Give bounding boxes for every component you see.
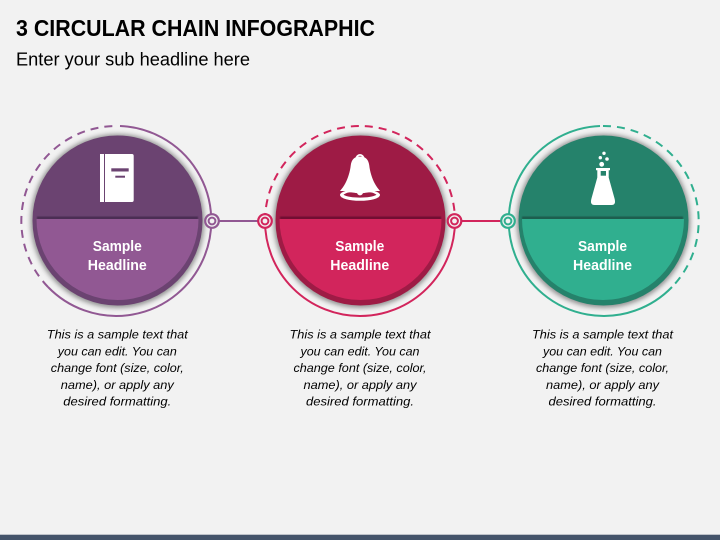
outer ring: dashed arc [603,126,699,287]
headline: Headline [573,258,632,274]
body text: name), or apply any [304,378,417,392]
body text [47,328,188,408]
panel: purple circle [21,126,219,408]
dark disc [518,136,688,306]
body text: change font (size, color, [536,361,669,375]
headline [88,239,147,274]
body text: change font (size, color, [294,361,426,375]
connector: crimson link [454,220,508,222]
connector node: right [448,214,461,228]
headline: Sample [93,239,142,255]
circle shadow [516,134,690,308]
icon: flask [591,152,615,205]
headline: Headline [88,258,147,274]
icon: book [100,154,134,202]
outer ring: dashed arc [265,126,455,221]
connector node [205,214,219,228]
body text [532,328,674,408]
sub headline: Enter your sub headline here [16,50,250,70]
body text: you can edit. You can [542,344,662,358]
headline: Headline [330,258,389,274]
body text: desired formatting. [63,394,171,408]
connector node [501,214,515,228]
body text: change font (size, color, [51,361,184,375]
body text: you can edit. You can [57,344,177,358]
divider shadow [280,216,441,220]
headline [573,239,632,274]
divider shadow [522,216,683,220]
dark disc [276,136,446,306]
body text [290,328,431,408]
body text: This is a sample text that [47,328,188,342]
light lower half [280,219,442,300]
connector node: left [258,214,272,228]
circle shadow [30,134,204,308]
circle shadow [274,134,448,308]
headline: Sample [335,239,384,255]
outer ring: solid arc [265,221,455,316]
outer ring: dashed arc [21,126,117,287]
headline [330,239,389,274]
body text: name), or apply any [546,378,660,392]
dark disc [32,136,202,306]
body text: desired formatting. [548,394,656,408]
body text: This is a sample text that [290,328,431,342]
outer ring: solid arc [48,126,211,316]
body text: you can edit. You can [299,344,420,358]
connector: purple link [212,220,265,222]
body text: name), or apply any [61,378,175,392]
light lower half [522,219,684,300]
headline: Sample [578,239,627,255]
light lower half [36,219,198,300]
body text: This is a sample text that [532,328,674,342]
body text: desired formatting. [306,394,414,408]
bottom bar [0,535,720,540]
divider shadow [37,216,198,220]
panel: crimson circle [258,126,461,408]
icon: bell [340,155,380,201]
title: 3 CIRCULAR CHAIN INFOGRAPHIC [16,15,375,41]
outer ring: solid arc [509,126,672,316]
panel: teal circle [501,126,699,408]
